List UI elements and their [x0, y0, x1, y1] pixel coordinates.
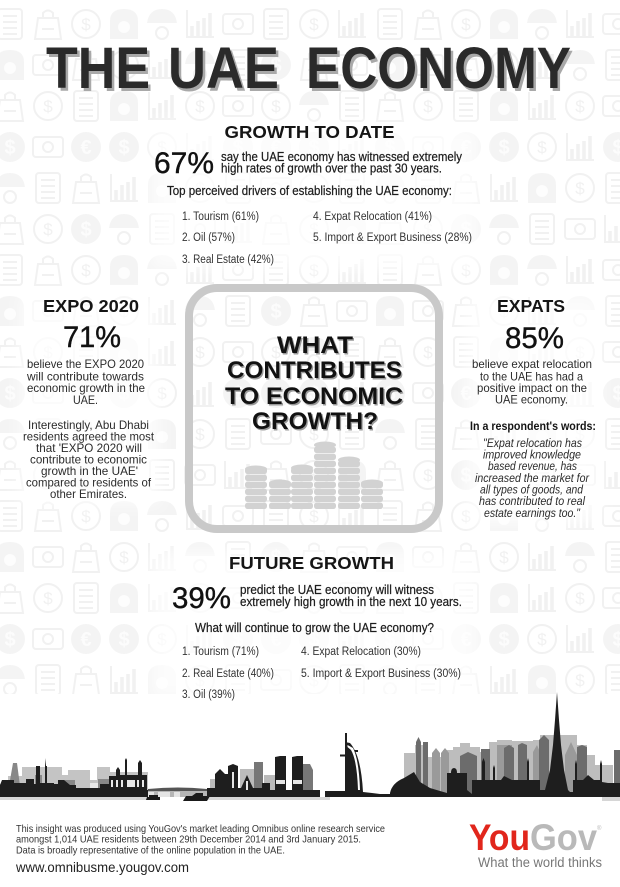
subheading: respondent: In a respondent's words:	[470, 419, 596, 433]
quote: respondent: improved knowledge	[483, 448, 581, 462]
title: THE	[46, 36, 150, 101]
heading: what contributes: TO ECONOMIC	[225, 383, 403, 410]
text: expat belief	[472, 357, 592, 406]
text: methodology note: This insight was produced using YouGov's market leading Omnibus online research service	[16, 824, 385, 835]
bridge	[148, 789, 207, 797]
list: drivers: 5. Import & Export Business (28%)	[313, 232, 472, 244]
list: drivers: 1. Tourism (61%)	[182, 211, 259, 223]
text: 67% description: high rates of growth over the past 30 years.	[221, 162, 442, 176]
text: abu dhabi note: residents agreed the most	[23, 430, 155, 444]
heading: future growth: FUTURE GROWTH	[229, 553, 394, 573]
stat: 67%: 67%	[154, 147, 214, 180]
middle buildings	[210, 769, 276, 790]
right light buildings	[404, 735, 613, 797]
text: 67% description	[221, 150, 463, 176]
text: abu dhabi note: that 'EXPO 2020 will	[36, 441, 142, 455]
text: abu dhabi note: Interestingly, Abu Dhabi	[28, 418, 149, 432]
text: expo belief: economic growth in the	[27, 381, 145, 395]
stat: 39%: 39%	[172, 582, 231, 615]
heading: what contributes: TO ECONOMIC	[226, 384, 405, 411]
list: future drivers	[182, 646, 461, 701]
heading: what contributes: WHAT	[278, 333, 354, 360]
text: abu dhabi note: other Emirates.	[50, 487, 127, 501]
panel: growth to date	[154, 122, 472, 266]
quote: respondent: based revenue, has	[488, 459, 577, 473]
list: future drivers: 3. Oil (39%)	[182, 689, 235, 701]
panel: expo 2020	[23, 296, 155, 501]
text: expat belief: to the UAE has had a	[480, 370, 583, 384]
logo: YouGov: What the world thinks	[478, 855, 602, 870]
list: drivers: 4. Expat Relocation (41%)	[313, 211, 432, 223]
quote: respondent	[475, 436, 590, 520]
heading: expo 2020: EXPO 2020	[43, 296, 139, 316]
quote: respondent: "Expat relocation has	[483, 436, 582, 450]
illustration: Dubai skyline	[0, 692, 620, 801]
heading: what contributes: WHAT	[277, 332, 353, 359]
gray base strip	[0, 797, 620, 801]
title: UAE	[170, 39, 282, 104]
text: abu dhabi note: contribute to economic	[30, 452, 147, 466]
title: ECONOMY	[308, 39, 574, 104]
text: expo belief	[26, 357, 145, 407]
quote: respondent: all types of goods, and	[480, 482, 583, 496]
text: 39% description: extremely high growth in the next 10 years.	[240, 595, 462, 609]
text: expat belief: believe expat relocation	[472, 357, 592, 371]
list: drivers	[182, 211, 472, 266]
text: expo belief: UAE.	[73, 393, 98, 407]
panel: future growth	[172, 553, 462, 701]
heading: what contributes: GROWTH?	[252, 408, 378, 435]
icon: coin stacks	[245, 442, 383, 509]
right dark skyline	[390, 692, 620, 797]
logo: YouGov: Gov	[530, 817, 597, 858]
boats	[146, 793, 210, 801]
logo: YouGov: You	[469, 817, 530, 858]
list: future drivers: 2. Real Estate (40%)	[182, 668, 274, 680]
text: website: www.omnibusme.yougov.com	[15, 860, 189, 875]
quote: respondent: increased the market for	[475, 471, 590, 485]
footer	[15, 817, 602, 875]
frame	[189, 288, 439, 529]
list: future drivers: 4. Expat Relocation (30%)	[301, 646, 421, 658]
text: expo belief: will contribute towards	[26, 370, 144, 384]
text: 39% description	[240, 583, 462, 609]
burj al arab	[325, 742, 390, 797]
text: abu dhabi note: compared to residents of	[26, 476, 152, 490]
title: UAE	[168, 36, 279, 101]
heading: what contributes: CONTRIBUTES	[228, 358, 403, 385]
subheading: top perceived drivers: Top perceived drivers of establishing the UAE economy:	[167, 184, 452, 198]
panel: what contributes to economic growth	[189, 288, 439, 529]
stat: 85%: 85%	[505, 322, 564, 355]
text: abu dhabi note: growth in the UAE'	[41, 464, 138, 478]
list: drivers: 3. Real Estate (42%)	[182, 254, 274, 266]
subheading: what will continue: What will continue to grow the UAE economy?	[195, 621, 434, 635]
title	[46, 36, 574, 104]
title: ECONOMY	[306, 36, 571, 101]
text: expat belief: UAE economy.	[495, 392, 568, 406]
title: THE	[48, 39, 152, 104]
left light buildings	[0, 767, 148, 797]
heading: expats: EXPATS	[497, 296, 565, 316]
list: drivers: 2. Oil (57%)	[182, 232, 235, 244]
list: future drivers: 5. Import & Export Business (30%)	[301, 668, 461, 680]
text: expo belief: believe the EXPO 2020	[27, 357, 144, 371]
text: abu dhabi note	[23, 418, 155, 501]
text: methodology note: Data is broadly representative of the online population in the UAE.	[16, 846, 285, 856]
quote: respondent: has contributed to real	[479, 494, 585, 508]
text: 39% description: predict the UAE economy will witness	[240, 583, 434, 597]
text: expat belief: positive impact on the	[477, 381, 587, 395]
left dark city	[0, 758, 148, 797]
text: methodology note: amongst 1,014 UAE residents between 29th December 2014 and 3rd January 2015.	[16, 834, 361, 846]
logo: YouGov	[469, 817, 602, 870]
quote: respondent: estate earnings too."	[484, 506, 581, 520]
left mid buildings	[9, 763, 109, 790]
heading: what contributes	[225, 332, 405, 436]
list: future drivers: 1. Tourism (71%)	[182, 646, 259, 658]
heading: what contributes: GROWTH?	[253, 409, 379, 436]
stat: 71%: 71%	[63, 321, 121, 354]
heading: growth to date: GROWTH TO DATE	[224, 122, 394, 142]
text: 67% description: say the UAE economy has witnessed extremely	[221, 150, 463, 164]
right mid buildings	[432, 742, 577, 797]
logo: YouGov: ®	[597, 825, 602, 832]
panel: expats	[470, 296, 596, 520]
heading: what contributes: CONTRIBUTES	[227, 357, 402, 384]
text: methodology note	[16, 824, 385, 856]
